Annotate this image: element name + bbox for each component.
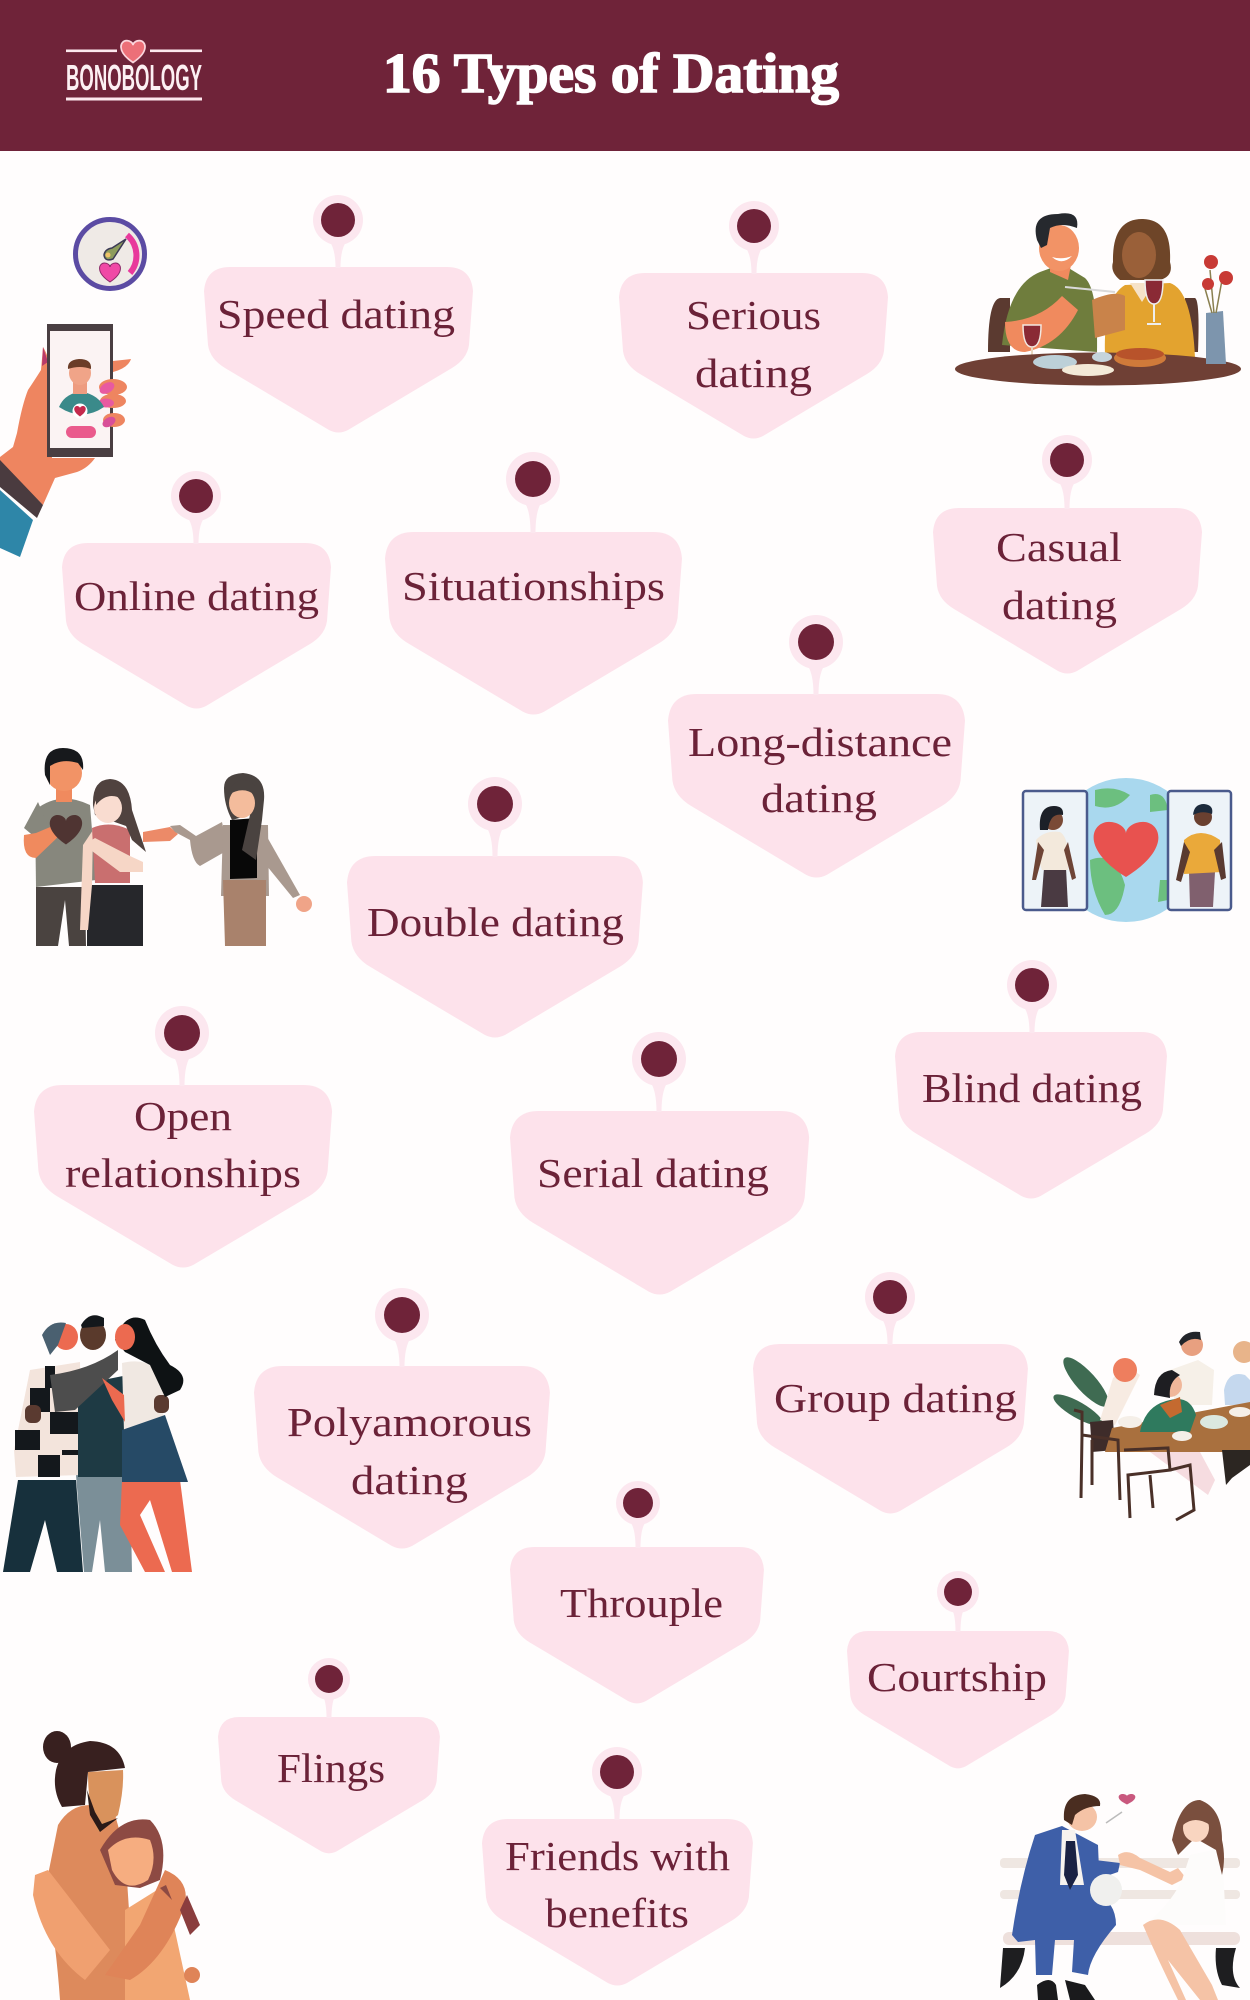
callout: Double dating	[347, 777, 643, 1038]
bubble	[218, 1717, 440, 1853]
bubble	[482, 1819, 753, 1985]
pin	[506, 452, 560, 533]
callout: Polyamorous dating	[254, 1288, 550, 1549]
label: Throuple	[560, 1580, 723, 1626]
callout: Courtship	[847, 1571, 1069, 1768]
pin	[468, 777, 522, 857]
pin	[1042, 435, 1092, 509]
callout: Group dating	[753, 1272, 1028, 1513]
label: Group dating	[774, 1375, 1017, 1421]
phone card: woman	[1023, 791, 1087, 910]
illustration: embracing couple	[33, 1731, 200, 2000]
illustration: polyamorous trio hugging	[3, 1315, 192, 1572]
illustration: courtship on a park bench	[1000, 1794, 1240, 2000]
pin	[865, 1272, 915, 1345]
bubble	[933, 508, 1202, 674]
bubble	[895, 1032, 1167, 1198]
label	[686, 292, 821, 396]
pin	[592, 1747, 642, 1820]
callout: Flings	[218, 1658, 440, 1853]
bubble	[753, 1344, 1028, 1513]
pin	[937, 1571, 979, 1632]
label: Polyamorous	[287, 1399, 532, 1445]
label	[688, 719, 952, 821]
pin	[729, 201, 779, 274]
title: 16 Types of Dating	[383, 43, 839, 105]
illustration: couple at a dinner table	[955, 213, 1241, 386]
callout: Throuple	[510, 1481, 764, 1703]
label: Flings	[277, 1745, 385, 1791]
pin	[375, 1288, 429, 1367]
label: Long-distance	[688, 719, 952, 765]
callout: Casual dating	[933, 435, 1202, 674]
bubble	[510, 1111, 809, 1295]
pin	[155, 1006, 209, 1086]
callout: Online dating	[62, 471, 331, 708]
label: Friends with	[505, 1833, 730, 1879]
callout: Friends with benefits	[482, 1747, 753, 1985]
label: benefits	[545, 1890, 689, 1936]
bubble	[34, 1085, 332, 1268]
pin	[789, 615, 843, 695]
label: Speed dating	[217, 291, 455, 337]
bubble	[510, 1547, 764, 1703]
label: Courtship	[867, 1654, 1047, 1700]
callout: Serial dating	[510, 1032, 809, 1295]
label: Serial dating	[537, 1150, 769, 1196]
bubble	[254, 1366, 550, 1549]
label: dating	[695, 350, 812, 396]
bubble	[204, 267, 473, 432]
pin	[171, 471, 221, 544]
header band	[0, 0, 1250, 151]
pin	[632, 1032, 686, 1112]
label	[65, 1093, 301, 1196]
illustration: long-distance couple with globe and phones	[1023, 778, 1231, 922]
illustration: hand holding phone	[0, 324, 131, 557]
illustration: couple and friend holding hands	[24, 748, 312, 946]
label: Serious	[686, 292, 821, 338]
label: Blind dating	[922, 1065, 1142, 1111]
label: dating	[351, 1457, 468, 1503]
label: Casual	[996, 524, 1122, 570]
phone card: man	[1168, 791, 1231, 910]
label: relationships	[65, 1150, 301, 1196]
icon: speedometer with heart	[76, 220, 144, 288]
callout: Open relationships	[34, 1006, 332, 1268]
bubble	[668, 694, 965, 878]
pin	[313, 195, 363, 268]
label: Open	[134, 1093, 232, 1139]
label	[505, 1833, 730, 1936]
callout: Blind dating	[895, 960, 1167, 1198]
label	[287, 1399, 532, 1503]
bubble	[385, 532, 682, 715]
callout: Situationships	[385, 452, 682, 715]
label: dating	[1002, 582, 1117, 628]
label	[996, 524, 1122, 628]
label: dating	[761, 775, 877, 821]
bubble	[847, 1631, 1069, 1768]
callout: Long-distance dating	[668, 615, 965, 878]
label: Online dating	[74, 573, 319, 619]
bubble	[62, 543, 331, 708]
pin	[308, 1658, 350, 1718]
label: Situationships	[402, 563, 665, 609]
logo: Bonobology: BONOBOLOGY	[66, 57, 202, 98]
bubble	[347, 856, 643, 1038]
pin	[616, 1481, 660, 1548]
pin	[1007, 960, 1057, 1033]
label: Double dating	[367, 899, 624, 945]
logo: Bonobology	[66, 41, 202, 100]
callout: Speed dating	[204, 195, 473, 432]
callout: Serious dating	[619, 201, 888, 438]
illustration: group dining at a table	[1050, 1332, 1250, 1520]
bubble	[619, 273, 888, 438]
